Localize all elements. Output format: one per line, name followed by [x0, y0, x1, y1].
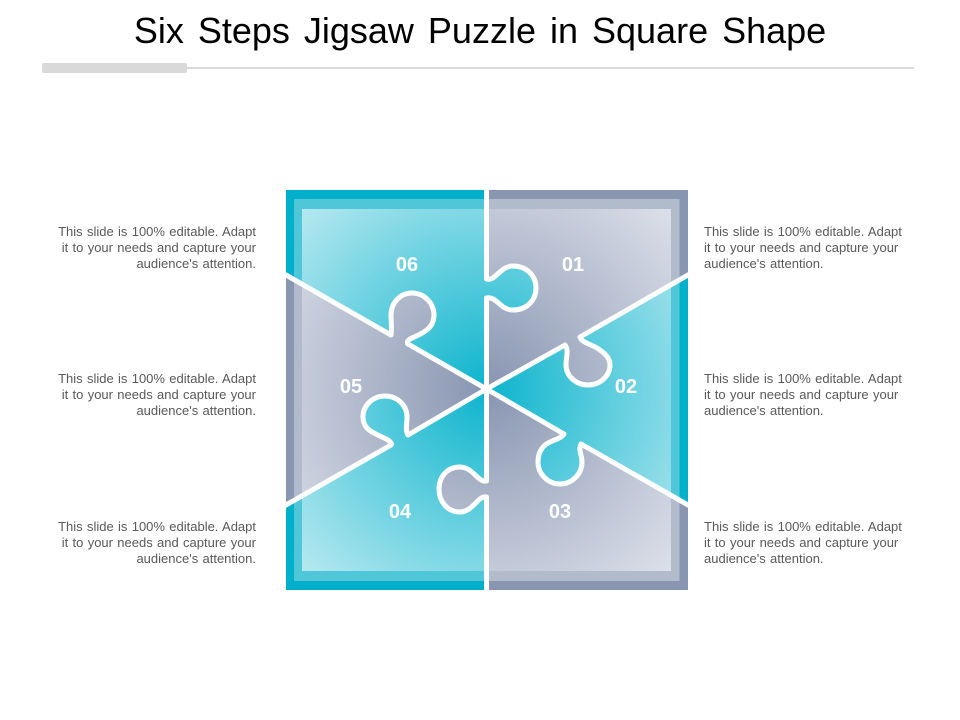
number 03: 03 [549, 501, 571, 523]
puzzle piece 02 [492, 278, 688, 502]
text block: right bottom: it to your needs and capture your [704, 535, 898, 550]
text block: right middle [704, 371, 902, 418]
number 04: 04 [389, 501, 412, 523]
text block: right bottom: This slide is 100% editable. Adapt [704, 519, 902, 534]
text block: left top: it to your needs and capture your [62, 240, 256, 255]
puzzle piece 05 [286, 278, 482, 502]
puzzle piece 06 [286, 190, 534, 385]
number 06: 06 [396, 254, 418, 276]
title underline accent bar [42, 63, 187, 73]
title: Six Steps Jigsaw Puzzle in Square Shape [134, 10, 826, 51]
text block: right top: This slide is 100% editable. Adapt [704, 224, 902, 239]
puzzle piece 01 [489, 190, 688, 385]
number 01: 01 [562, 254, 584, 276]
text block: right middle: This slide is 100% editable. Adapt [704, 371, 902, 386]
puzzle piece 04 [286, 393, 484, 590]
text block: right top: it to your needs and capture your [704, 240, 898, 255]
text block: left bottom: This slide is 100% editable. Adapt [58, 519, 256, 534]
jigsaw puzzle square [286, 190, 688, 590]
text block: left top [58, 224, 256, 271]
text block: left bottom [58, 519, 256, 566]
text block: left bottom: audience's attention. [136, 551, 256, 566]
puzzle piece 03 [442, 393, 688, 590]
text block: left top: audience's attention. [136, 256, 256, 271]
text block: left middle: it to your needs and capture your [62, 387, 256, 402]
text block: left middle: audience's attention. [136, 403, 256, 418]
text block: right top [704, 224, 902, 271]
text block: left middle: This slide is 100% editable. Adapt [58, 371, 256, 386]
text block: right middle: audience's attention. [704, 403, 824, 418]
text block: right middle: it to your needs and capture your [704, 387, 898, 402]
text block: left bottom: it to your needs and capture your [62, 535, 256, 550]
number 05: 05 [340, 376, 362, 398]
white interlocking seams between pieces [285, 188, 689, 592]
text block: right top: audience's attention. [704, 256, 824, 271]
text block: left top: This slide is 100% editable. Adapt [58, 224, 256, 239]
text block: right bottom [704, 519, 902, 566]
text block: left middle [58, 371, 256, 418]
number 02: 02 [615, 376, 637, 398]
text block: right bottom: audience's attention. [704, 551, 824, 566]
